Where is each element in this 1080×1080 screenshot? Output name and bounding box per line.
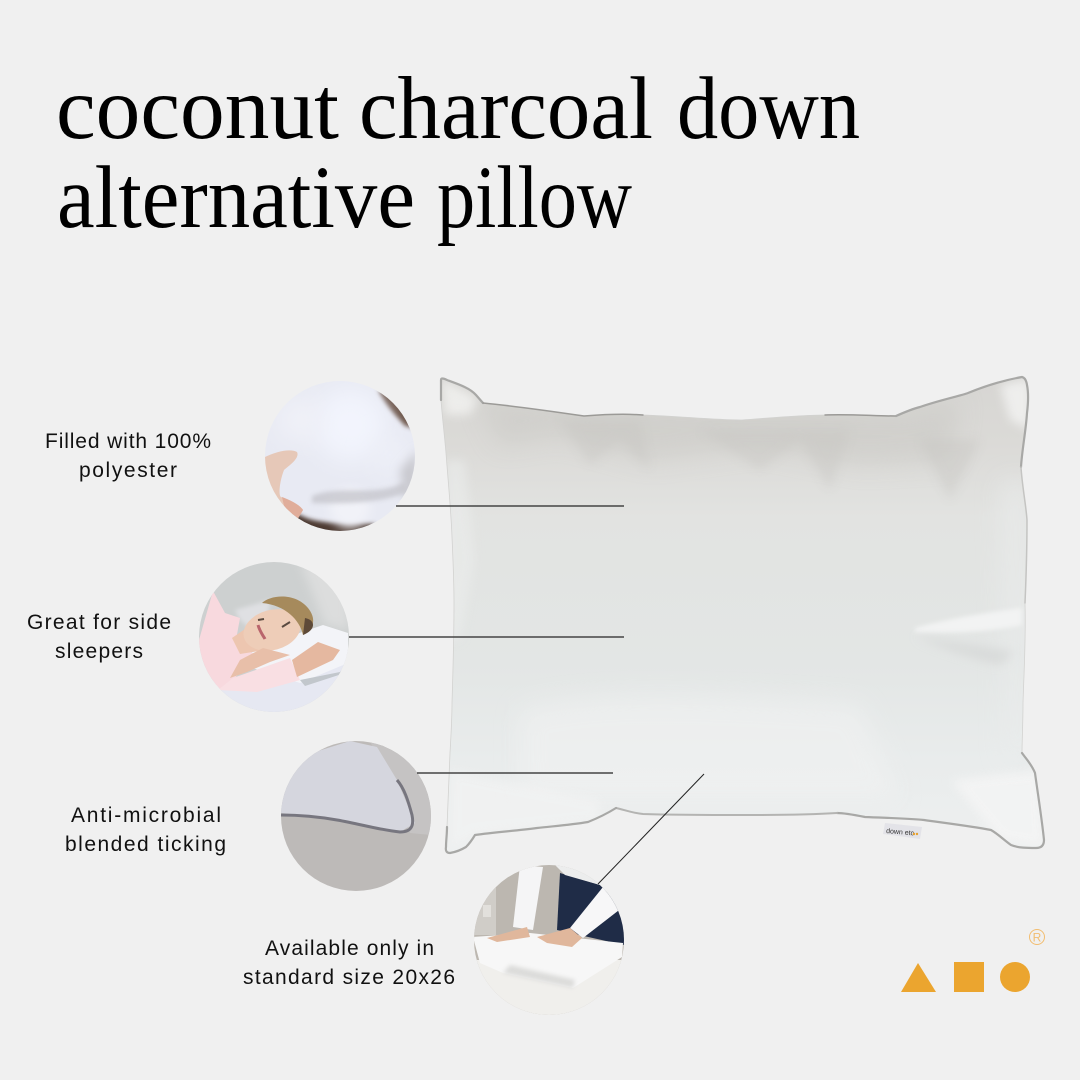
title: charcoal <box>359 60 653 158</box>
brand logo: R <box>1033 930 1042 944</box>
photo circle: side sleeper <box>199 562 349 712</box>
pillow piping <box>441 377 1044 853</box>
label: side sleepers: Great for side <box>27 611 171 634</box>
label: polyester: Filled with 100% <box>45 430 211 453</box>
label: side sleepers <box>27 611 171 663</box>
brand logo <box>901 930 1044 992</box>
label: side sleepers: sleepers <box>55 640 143 663</box>
label: size: standard size 20x26 <box>243 966 455 989</box>
label: size <box>243 937 455 989</box>
photo circle: pressing pillow <box>473 865 624 1015</box>
label: size: Available only in <box>265 937 434 960</box>
pillow tag: down etc <box>886 828 915 837</box>
label: ticking: Anti-microbial <box>71 804 221 827</box>
title: down <box>677 60 860 158</box>
connector lines <box>349 506 704 884</box>
photo circle: ticking <box>280 741 431 891</box>
label: polyester <box>45 430 211 482</box>
title: alternative <box>57 149 415 247</box>
label: ticking <box>65 804 226 856</box>
title <box>56 60 860 247</box>
label: ticking: blended ticking <box>65 833 226 856</box>
label: polyester: polyester <box>79 459 177 482</box>
photo circle: polyester fill <box>265 390 415 531</box>
pillow tag <box>883 823 922 839</box>
title: pillow <box>437 149 632 247</box>
title: coconut <box>56 60 339 158</box>
pillow photo <box>430 370 1060 860</box>
